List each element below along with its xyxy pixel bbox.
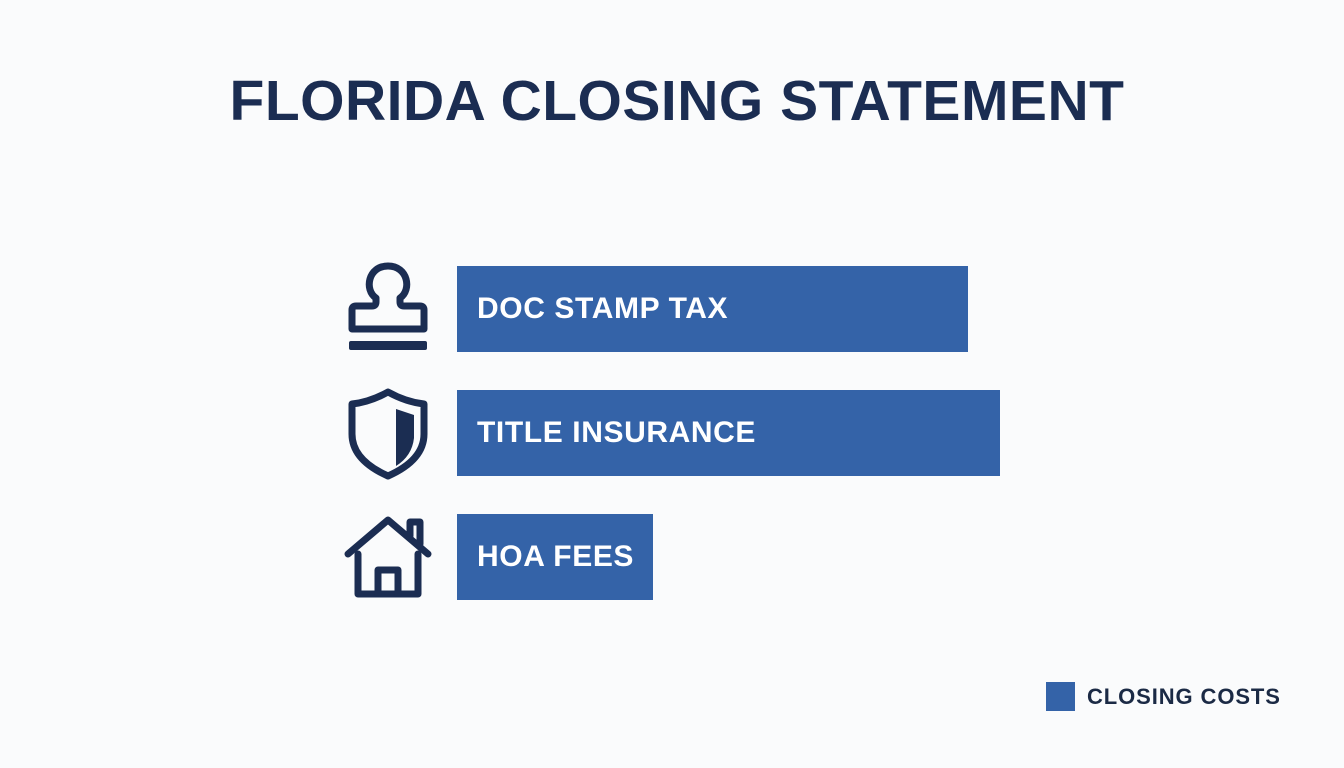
legend: CLOSING COSTS xyxy=(1087,684,1281,709)
bar: hoa fees: HOA FEES xyxy=(477,540,634,573)
bar: title insurance: TITLE INSURANCE xyxy=(477,416,756,449)
icon: house xyxy=(344,516,432,598)
bar: hoa fees xyxy=(457,514,653,600)
icon: shield xyxy=(348,388,428,480)
bar: doc stamp tax xyxy=(457,266,968,352)
bar: doc stamp tax: DOC STAMP TAX xyxy=(477,292,728,325)
bar: title insurance xyxy=(457,390,1000,476)
title: FLORIDA CLOSING STATEMENT xyxy=(230,69,1124,133)
icon: stamp xyxy=(348,262,428,350)
